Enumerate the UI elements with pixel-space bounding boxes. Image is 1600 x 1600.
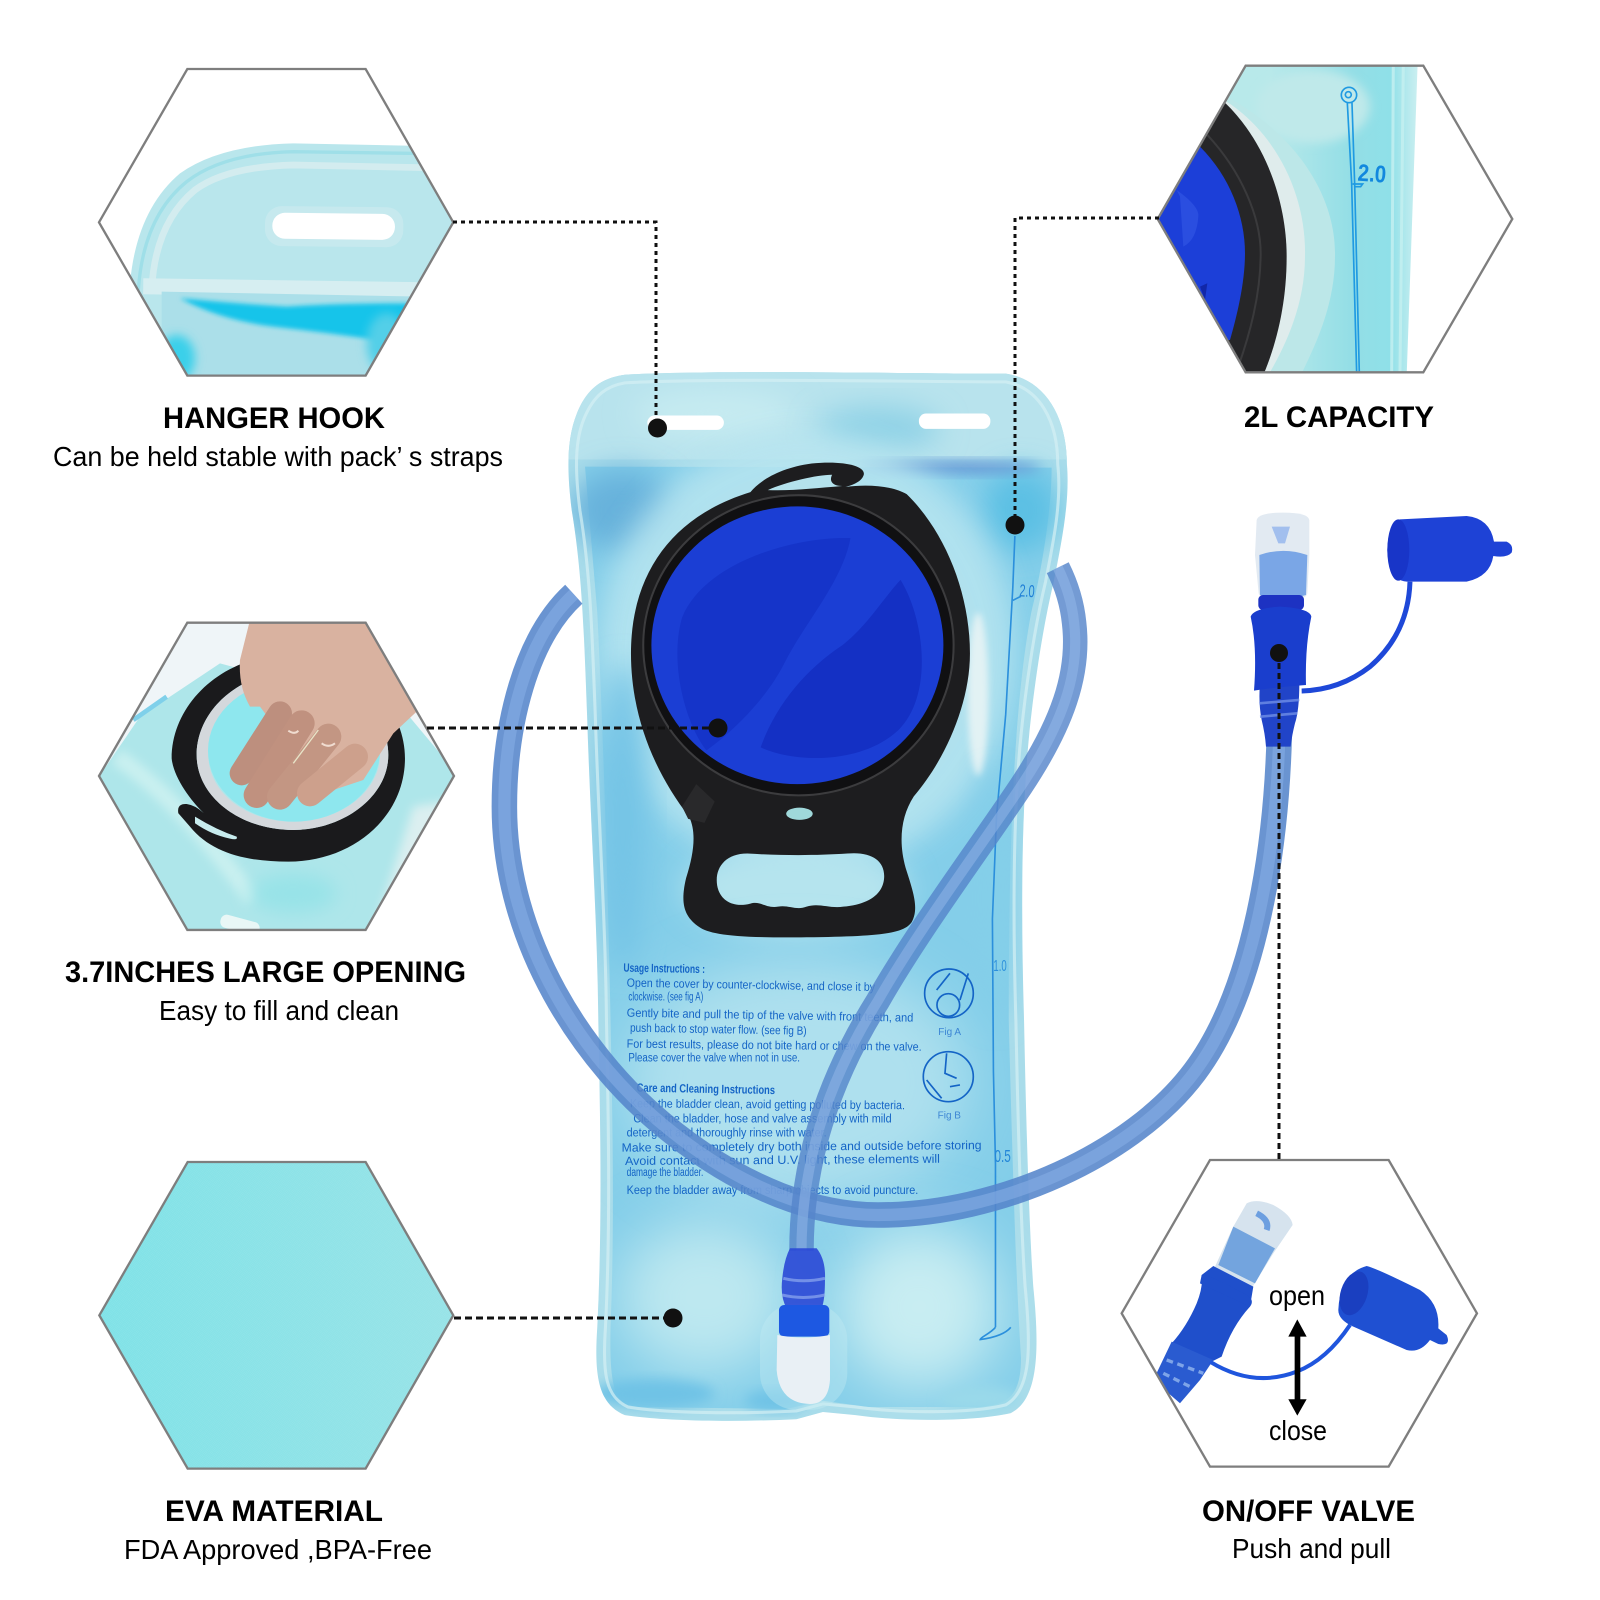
caption: capacity: 2L CAPACITY (1244, 401, 1434, 434)
panel: hanger hook hexagon (99, 69, 460, 383)
tether strap (1210, 1325, 1350, 1378)
tether strap (1302, 582, 1410, 691)
hanger holes (647, 414, 990, 430)
usage instructions printed on the bladder: Gently bite and pull the tip of the valve with front teeth, and (627, 1006, 913, 1025)
dust cap (1338, 1266, 1448, 1351)
panel: on/off valve hexagon (1122, 1160, 1477, 1467)
usage instructions printed on the bladder: Keep the bladder away from sharp objects to avoid puncture. (627, 1183, 918, 1197)
caption: EVA material: FDA Approved ,BPA-Free (124, 1534, 432, 1565)
latch on frame (682, 784, 715, 823)
usage instructions printed on the bladder: damage the bladder. (627, 1165, 703, 1179)
capacity scale photo (1153, 63, 1418, 377)
usage instructions printed on the bladder: Usage Instructions : (623, 961, 705, 976)
panel: EVA material hexagon (99, 1162, 453, 1469)
spout connector at the bladder bottom (760, 1248, 847, 1410)
main product: hydration bladder (568, 372, 1068, 1421)
hand (240, 620, 417, 797)
dust cap (1387, 516, 1512, 582)
material swatch (99, 1162, 453, 1469)
lower recessed lobe (761, 580, 922, 758)
measuring line (1341, 87, 1387, 372)
open close arrow (1288, 1319, 1307, 1416)
bite valve (1215, 1201, 1293, 1288)
caption: on/off valve: ON/OFF VALVE (1202, 1495, 1415, 1528)
big hose loop (504, 594, 1279, 1215)
usage instructions printed on the bladder: Please cover the valve when not in use. (628, 1051, 800, 1065)
clear bite valve (1255, 513, 1309, 601)
figure A icon (925, 969, 973, 1038)
black frame arc (1200, 103, 1287, 372)
hanger detail photo (130, 143, 460, 383)
caption: large opening: 3.7INCHES LARGE OPENING (65, 956, 466, 989)
bladder body (568, 372, 1068, 1421)
label: open: open (1269, 1280, 1325, 1311)
measuring scale printed on bladder: 2.0 (1019, 580, 1035, 601)
caption: large opening (65, 956, 466, 1026)
ribbed hose end (782, 1248, 825, 1308)
usage instructions printed on the bladder: Clean the bladder, hose and valve assembly with mild (633, 1112, 892, 1126)
measuring scale printed on bladder: 0.5 (994, 1146, 1011, 1166)
label: close: close (1269, 1415, 1327, 1446)
dotted leader: hanger hook (453, 222, 667, 438)
black ring (172, 655, 405, 862)
threaded neck (1259, 683, 1299, 747)
dotted leader: opening (427, 718, 728, 738)
caption: on/off valve: Push and pull (1232, 1533, 1391, 1564)
material texture (99, 1162, 453, 1469)
usage instructions printed on the bladder (622, 961, 982, 1197)
usage instructions printed on the bladder: clockwise. (see fig A) (628, 990, 703, 1004)
water visible through opening (208, 680, 380, 822)
upper right bite valve and cap (1251, 513, 1512, 747)
caption: on/off valve (1202, 1495, 1415, 1564)
measuring line: 2.0 (1357, 160, 1387, 189)
dotted leader: EVA material (454, 1308, 682, 1328)
panel: large opening hexagon (97, 620, 457, 937)
hose from spout to top right behind bladder (801, 568, 1075, 1251)
black fill cap frame and handle (631, 463, 970, 937)
hose ribs (1153, 1342, 1213, 1403)
hook slot on ring (195, 817, 237, 839)
figure B icon (923, 1052, 973, 1121)
silicone gasket (197, 672, 388, 830)
neck ring (1258, 595, 1304, 610)
caption: hanger hook: HANGER HOOK (163, 402, 385, 435)
white cap (777, 1335, 830, 1404)
usage instructions printed on the bladder: Keep the bladder clean, avoid getting polluted by bacteria. (630, 1096, 905, 1112)
hand in opening photo (97, 620, 457, 937)
hexagon border (1158, 66, 1512, 372)
header seal band (568, 372, 1067, 460)
blue lid (651, 506, 943, 784)
usage instructions printed on the bladder: push back to stop water flow. (see fig B) (630, 1021, 807, 1038)
figure B icon: Fig B (938, 1110, 961, 1121)
seam lines (576, 380, 1059, 1413)
hexagon border (99, 623, 454, 930)
inner ring detail (643, 495, 954, 795)
caption: EVA material (124, 1495, 432, 1565)
valve vent hole (786, 808, 813, 820)
usage instructions printed on the bladder: Open the cover by counter-clockwise, and close it by (627, 976, 875, 994)
hexagon border (99, 69, 453, 376)
usage instructions printed on the bladder: Avoid contact with sun and U.V. light, these elements will (625, 1152, 940, 1168)
caption: hanger hook: Can be held stable with pack’ s straps (53, 441, 503, 472)
valve body (1172, 1266, 1253, 1362)
valve photo (1153, 1201, 1448, 1403)
usage instructions printed on the bladder: detergent and thoroughly rinse with water. (627, 1126, 827, 1140)
blue collar (779, 1305, 829, 1337)
usage instructions printed on the bladder: Care and Cleaning Instructions (637, 1081, 775, 1097)
upper recessed lobe (677, 538, 850, 750)
hook slot (768, 475, 842, 490)
caption: hanger hook (53, 402, 503, 472)
measuring scale printed on bladder: 1.0 (993, 958, 1007, 975)
dotted leader: valve (1270, 644, 1288, 1160)
dotted leader: capacity (1006, 218, 1159, 534)
usage instructions printed on the bladder: Make sure to completely dry both inside and outside before storing (622, 1138, 982, 1155)
usage instructions printed on the bladder: For best results, please do not bite hard or chew on the valve. (627, 1037, 922, 1054)
figure A icon: Fig A (938, 1027, 961, 1038)
valve body (1251, 607, 1311, 691)
measuring scale printed on bladder (980, 536, 1035, 1340)
caption: large opening: Easy to fill and clean (159, 995, 399, 1026)
caption: EVA material: EVA MATERIAL (165, 1495, 383, 1528)
hexagon border (1122, 1160, 1477, 1467)
panel: 2L capacity hexagon (1153, 63, 1512, 377)
blue lid arc (1153, 147, 1245, 340)
